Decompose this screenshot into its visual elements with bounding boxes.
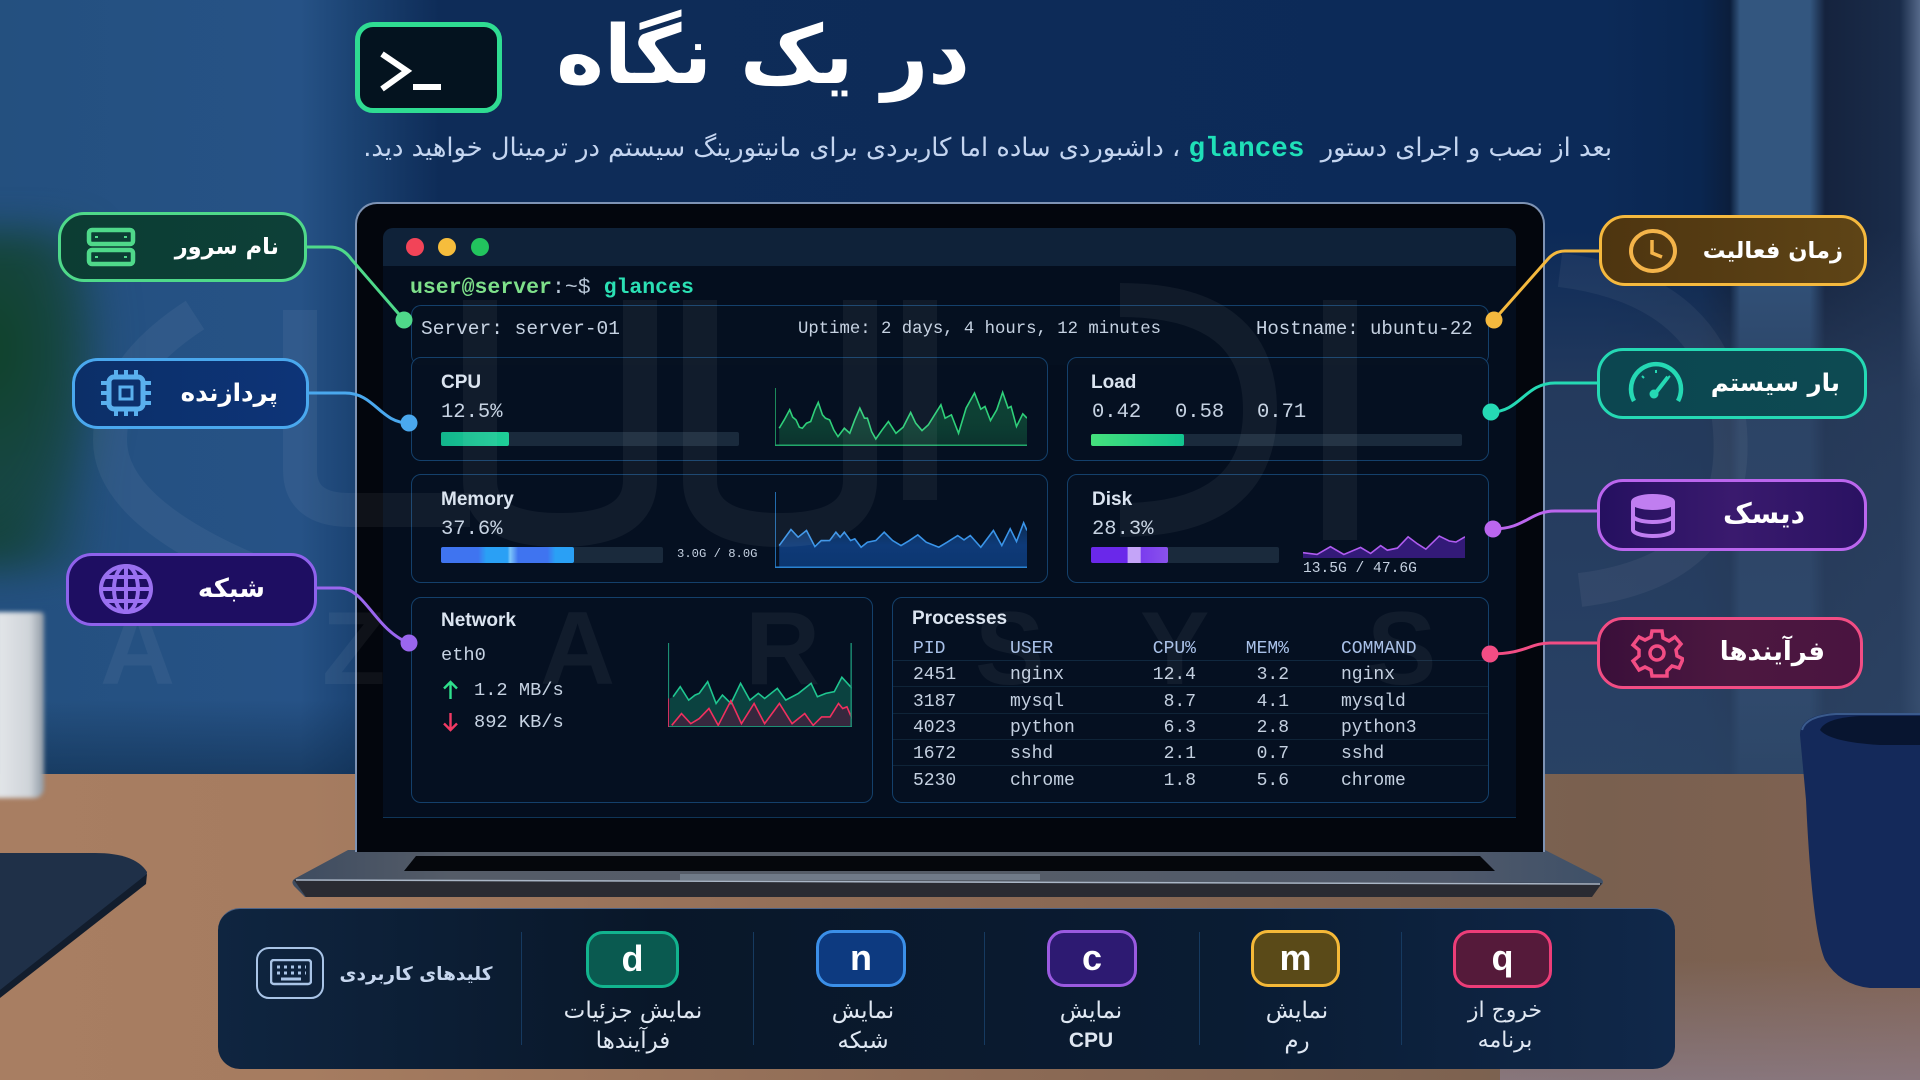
table header: COMMAND — [1341, 639, 1417, 659]
row nginx: 2451 — [913, 665, 956, 685]
row sshd — [893, 745, 1488, 766]
icon: keyboard — [256, 947, 324, 999]
notebook on desk — [0, 853, 147, 998]
watermark: A — [100, 591, 175, 707]
Memory bar fill — [441, 547, 574, 563]
row sshd: 1672 — [913, 744, 956, 764]
icon: globe — [99, 564, 153, 614]
key n: n — [850, 937, 872, 978]
Load heading: Load — [1091, 372, 1136, 393]
label: نام سرور — [175, 234, 279, 260]
row python: 2.8 — [1257, 718, 1289, 738]
row nginx — [893, 666, 1488, 687]
icon: upload arrow — [443, 680, 458, 699]
callout: system load — [1597, 348, 1867, 419]
watermark: R — [745, 591, 820, 707]
key d — [586, 931, 679, 988]
Memory sparkline — [775, 492, 1027, 568]
yellow window dot — [438, 238, 456, 256]
background: blue wall — [0, 0, 1920, 790]
row nginx: nginx — [1341, 665, 1395, 685]
row python — [893, 719, 1488, 740]
key m — [1251, 930, 1340, 987]
CPU bar fill — [441, 432, 509, 446]
text: رم — [1284, 1028, 1310, 1054]
row chrome — [913, 771, 1406, 791]
hostname: Hostname: ubuntu-22 — [1256, 318, 1473, 340]
label: پردازنده — [181, 378, 278, 407]
CPU heading: CPU — [441, 372, 481, 393]
key c: c — [1082, 937, 1102, 978]
panel: useful keys — [218, 908, 1675, 1069]
key d label: نمایش جزئیات — [564, 998, 702, 1024]
key q: q — [1492, 937, 1514, 978]
Disk heading: Disk — [1092, 489, 1132, 510]
command prompt: user@server:~$ glances — [410, 276, 694, 300]
key c — [1047, 930, 1137, 987]
title: در یک نگاه — [556, 9, 970, 103]
Processes heading: Processes — [912, 608, 1007, 629]
row python: 6.3 — [1164, 718, 1196, 738]
row mysql — [893, 693, 1488, 714]
row mysql: mysql — [1010, 692, 1064, 712]
panel: server info row — [411, 305, 1489, 365]
Memory usage amount: 3.0G / 8.0G — [677, 547, 757, 561]
callout: disk — [1597, 479, 1867, 551]
label: شبکه — [198, 574, 265, 604]
icon: gauge — [1628, 362, 1684, 402]
laptop base — [292, 850, 1603, 897]
text: فرآیندها — [596, 1028, 670, 1054]
key q — [1453, 930, 1552, 988]
table header: USER — [1010, 639, 1053, 659]
watermark: Z — [322, 591, 386, 707]
Memory bar — [441, 547, 663, 563]
Load bar — [1091, 434, 1462, 446]
red window dot — [406, 238, 424, 256]
keys heading: کلیدهای کاربردی — [340, 964, 492, 985]
table header: MEM% — [1246, 639, 1289, 659]
key n label: نمایش — [832, 998, 894, 1024]
row python: python — [1010, 718, 1075, 738]
row mysql: 4.1 — [1257, 692, 1289, 712]
icon: gear — [1630, 629, 1684, 678]
watermark: S — [975, 591, 1044, 707]
panel: Network — [411, 597, 873, 803]
Disk bar fill — [1091, 547, 1168, 563]
background: right wall lower tone — [1545, 230, 1920, 780]
CPU sparkline — [775, 388, 1027, 446]
callout: processor — [72, 358, 309, 429]
CPU value: 12.5% — [441, 401, 503, 424]
green window dot — [471, 238, 489, 256]
row sshd: 2.1 — [1164, 744, 1196, 764]
panel: Memory — [411, 474, 1048, 583]
callout: server name — [58, 212, 307, 282]
text: شبکه — [837, 1028, 889, 1054]
icon: clock — [1629, 229, 1677, 273]
row nginx: nginx — [1010, 665, 1064, 685]
divider — [521, 932, 522, 1045]
Disk value: 28.3% — [1092, 518, 1154, 541]
Disk sparkline — [1303, 535, 1465, 558]
upload rate: 1.2 MB/s — [474, 679, 564, 701]
background: wooden desk — [0, 774, 1920, 1080]
label: بار سیستم — [1711, 368, 1840, 397]
callout: uptime — [1599, 215, 1867, 286]
watermark: Y — [1140, 591, 1209, 707]
Disk bar — [1091, 547, 1279, 563]
row python: 4023 — [913, 718, 956, 738]
panel: Disk — [1067, 474, 1489, 583]
icon: download arrow — [443, 713, 458, 732]
label: زمان فعالیت — [1703, 238, 1843, 264]
Memory heading: Memory — [441, 489, 514, 510]
Load bar fill — [1091, 434, 1184, 446]
Load value 15 min: 0.71 — [1257, 401, 1306, 424]
panel: Load — [1067, 357, 1489, 461]
background: lower wall shade — [0, 700, 1920, 780]
Disk usage amount: 13.5G / 47.6G — [1303, 561, 1417, 577]
terminal window — [383, 228, 1516, 818]
label: فرآیندها — [1720, 637, 1825, 667]
row mysql: 8.7 — [1164, 692, 1196, 712]
row sshd: sshd — [1341, 744, 1384, 764]
row sshd: 0.7 — [1257, 744, 1289, 764]
row nginx: 12.4 — [1153, 665, 1196, 685]
row nginx: 3.2 — [1257, 665, 1289, 685]
laptop lid — [355, 202, 1545, 852]
Network heading: Network — [441, 610, 516, 631]
plant foliage — [0, 230, 110, 570]
server name: Server: server-01 — [421, 318, 620, 340]
row python: python3 — [1341, 718, 1417, 738]
CPU bar — [441, 432, 739, 446]
table header — [893, 640, 1488, 661]
label: دیسک — [1723, 497, 1805, 530]
watermark: S — [1367, 591, 1436, 707]
watermark: A — [540, 591, 615, 707]
row sshd: sshd — [1010, 744, 1053, 764]
Memory value: 37.6% — [441, 518, 503, 541]
text: برنامه — [1478, 1028, 1532, 1053]
icon: server — [86, 228, 136, 266]
row mysql: 3187 — [913, 692, 956, 712]
subtitle: بعد از نصب و اجرای دستور glances ، داشبوردی ساده اما کاربردی برای مانیتورینگ سیستم در ترمینال خواهید دید. — [363, 133, 1612, 165]
title icon: terminal prompt — [355, 22, 502, 113]
key d: d — [622, 938, 644, 979]
download rate: 892 KB/s — [474, 711, 564, 733]
text: CPU — [1069, 1029, 1113, 1052]
table header: PID — [913, 639, 945, 659]
key c label: نمایش — [1060, 998, 1122, 1024]
uptime: Uptime: 2 days, 4 hours, 12 minutes — [798, 320, 1161, 339]
row chrome: chrome — [1341, 771, 1406, 791]
interface name: eth0 — [441, 644, 486, 666]
callout: network — [66, 553, 317, 626]
row chrome: chrome — [1010, 771, 1075, 791]
panel: CPU — [411, 357, 1048, 461]
row chrome: 1.8 — [1164, 771, 1196, 791]
icon: CPU chip — [101, 370, 151, 416]
plant pot — [0, 612, 44, 798]
panel: Processes — [892, 597, 1489, 803]
Network sparkline — [668, 643, 852, 727]
key m: m — [1279, 937, 1312, 978]
terminal title bar — [383, 228, 1516, 266]
key q label: خروج از — [1468, 998, 1542, 1023]
key n — [816, 930, 906, 987]
table header: CPU% — [1153, 639, 1196, 659]
Load value 5 min: 0.58 — [1175, 401, 1224, 424]
coffee mug — [1800, 713, 1920, 988]
row mysql: mysqld — [1341, 692, 1406, 712]
Load value 1 min: 0.42 — [1092, 401, 1141, 424]
icon: database — [1631, 494, 1675, 538]
row chrome: 5230 — [913, 771, 956, 791]
background: desk light streak — [1500, 960, 1920, 1080]
callout: processes — [1597, 617, 1863, 689]
key m label: نمایش — [1266, 998, 1328, 1024]
row chrome: 5.6 — [1257, 771, 1289, 791]
